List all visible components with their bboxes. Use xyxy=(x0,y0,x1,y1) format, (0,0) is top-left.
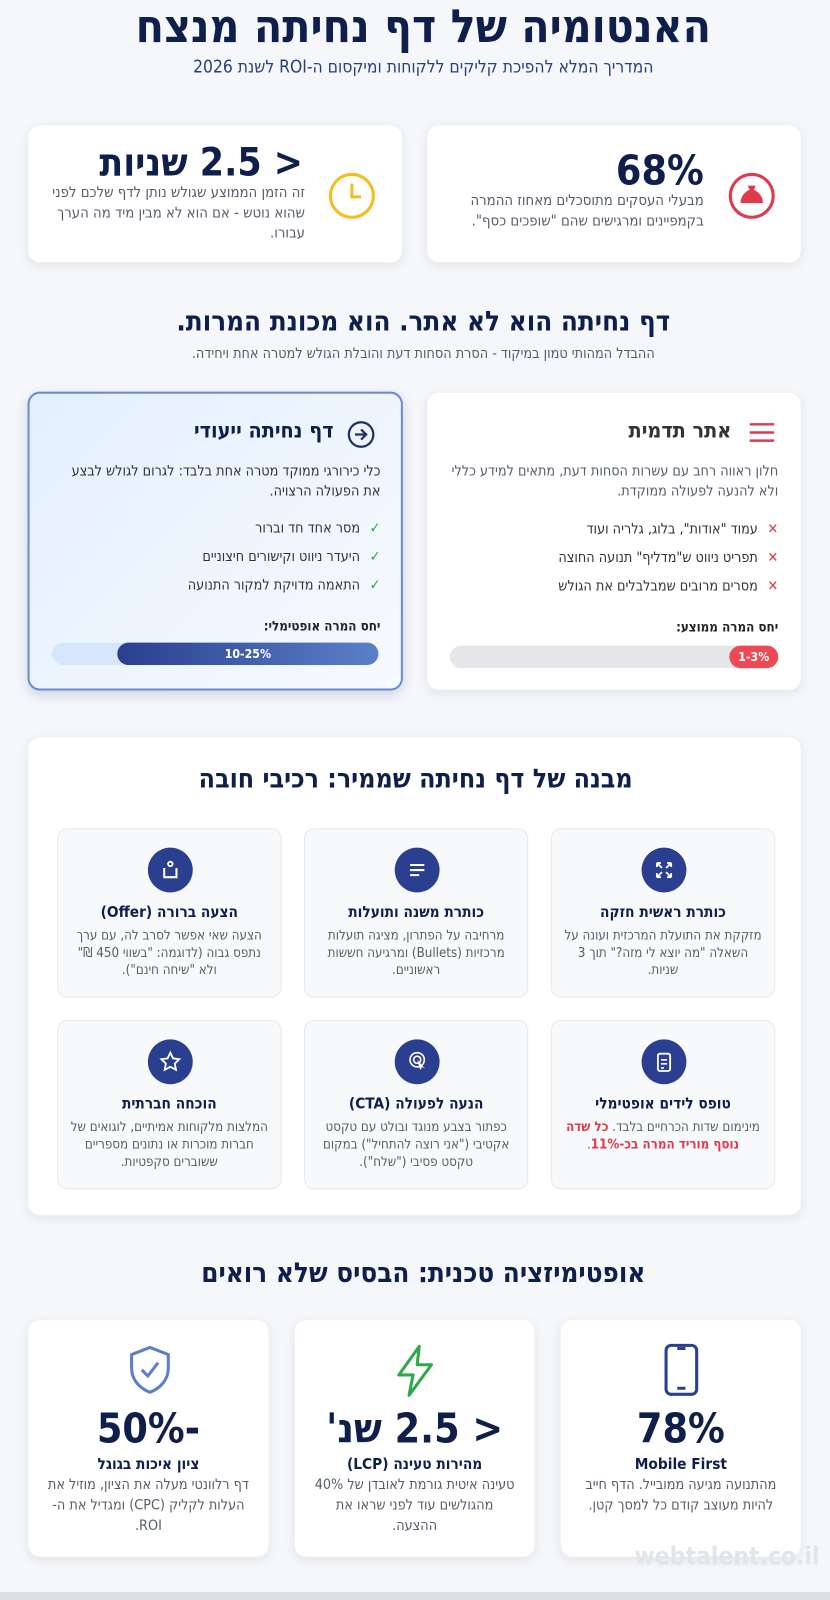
card: social proof: הוכחה חברתית xyxy=(122,1094,217,1113)
card: quality score: דף רלוונטי מעלה את הציון, מוזיל את העלות לקליק (CPC) ומגדיל את ה-ROI. xyxy=(48,1477,249,1534)
description: כלי כירורגי ממוקד מטרה אחת בלבד: לגרום לגולש לבצע את הפעולה הרצויה. xyxy=(72,463,380,500)
icon: shield xyxy=(130,1346,170,1394)
card: LCP: מהירות טעינה (LCP) xyxy=(347,1455,482,1473)
stat text: מבעלי העסקים מתוסכלים מאחוז ההמרה בקמפיינים ומרגישים שהם "שופכים כסף". xyxy=(470,193,704,230)
list: מסר אחד חד וברור xyxy=(255,520,360,537)
icon: lightning xyxy=(397,1344,434,1397)
icon: box xyxy=(148,848,193,892)
icon: expand xyxy=(642,848,686,892)
icon: money bag xyxy=(728,172,775,219)
bottom bar xyxy=(0,1592,830,1600)
card: mobile first: Mobile First xyxy=(635,1455,727,1473)
card: mobile first: מהתנועה מגיעה ממובייל. הדף חייב להיות מעוצב קודם כל למסך קטן. xyxy=(585,1477,776,1514)
icon: star xyxy=(148,1039,193,1084)
panel: structure xyxy=(28,736,802,1216)
panel: corporate site: מסרים מרובים שמבלבלים את הגולש xyxy=(558,578,758,595)
card: subheading xyxy=(304,828,528,998)
panel: landing page: ✓ xyxy=(370,577,380,594)
bar: 10-25% xyxy=(52,643,378,665)
card: headline: כותרת ראשית חזקה xyxy=(600,903,726,921)
description: חלון ראווה רחב עם עשרות הסחות דעת, מתאים למידע כללי ולא להנעה לפעולה ממוקדת. xyxy=(452,463,778,500)
panel: landing page: ✓ xyxy=(370,549,380,565)
card: LCP xyxy=(294,1319,536,1558)
title: האנטומיה של דף נחיתה מנצח xyxy=(136,0,711,53)
card: offer xyxy=(57,828,282,998)
card: subheading: כותרת משנה ותועלות xyxy=(348,903,484,921)
card: headline: מזקקת את התועלת המרכזית ועונה על השאלה "מה יוצא לי מזה?" תוך 3 שניות. xyxy=(564,928,762,978)
icon: clipboard xyxy=(642,1039,686,1084)
stat number: 68% xyxy=(616,148,704,195)
panel: corporate site: ✕ xyxy=(767,550,778,566)
card: LCP: < 2.5 שנ' xyxy=(326,1406,503,1452)
card: subheading: מרחיבה על הפתרון, מציגה תועלות מרכזיות (Bullets) ומרגיעה חששות ראשוניים. xyxy=(328,928,505,978)
card: mobile first xyxy=(560,1319,802,1558)
card: lead form xyxy=(551,1020,775,1189)
panel: corporate site: תפריט ניווט ש"מדליף" תנועה החוצה xyxy=(558,550,758,566)
section heading: landing page vs site: דף נחיתה הוא לא אתר. הוא מכונת המרות. xyxy=(176,306,670,338)
icon: clock xyxy=(328,172,375,219)
panel: landing page xyxy=(28,392,403,691)
icon: arrow circle xyxy=(348,421,374,448)
card: CTA xyxy=(304,1020,528,1189)
heading: אתר תדמית xyxy=(629,418,731,443)
card: social proof: המלצות מלקוחות אמיתיים, לוגואים של חברות מוכרות או נתונים מספריים ששוברים סקפטיות. xyxy=(71,1120,268,1170)
panel: corporate site xyxy=(426,392,802,691)
watermark: webtalent.co.il xyxy=(634,1542,820,1571)
card: LCP: טעינה איטית גורמת לאובדן של 40% מהגולשים עוד לפני שראו את ההצעה. xyxy=(315,1477,515,1534)
card: CTA: כפתור בצבע מנוגד ובולט עם טקסט אקטיבי ("אני רוצה להתחיל") במקום טקסט פסיבי ("שלח"). xyxy=(323,1120,509,1170)
card: quality score: -50% xyxy=(97,1406,200,1452)
icon: lines xyxy=(395,848,440,892)
list: עמוד "אודות", בלוג, גלריה ועוד xyxy=(587,521,758,538)
stat text: זה הזמן הממוצע שגולש נותן לדף שלכם לפני שהוא נוטש - אם הוא לא מבין מיד מה הערך עבורו. xyxy=(52,185,305,242)
bar: 10-25%: 10-25% xyxy=(225,647,271,661)
subtitle: המדריך המלא להפיכת קליקים ללקוחות ומיקסום ה-ROI לשנת 2026 xyxy=(193,57,653,78)
card: CTA: הנעה לפעולה (CTA) xyxy=(349,1094,483,1113)
card: lead form: מינימום שדות הכרחיים בלבד. כל שדה נוסף מוריד המרה בכ-11%. xyxy=(566,1120,760,1153)
card: mobile first: 78% xyxy=(637,1406,725,1452)
bar: 1-3% xyxy=(450,646,778,668)
icon: phone xyxy=(664,1344,698,1396)
section subtext: ההבדל המהותי טמון במיקוד - הסרת הסחות דעת והובלת הגולש למטרה אחת ויחידה. xyxy=(192,346,655,362)
heading: דף נחיתה ייעודי xyxy=(194,418,334,443)
list: ✕ xyxy=(767,521,778,538)
icon: hamburger xyxy=(750,423,774,442)
card: lead form: טופס לידים אופטימלי xyxy=(595,1094,731,1113)
panel: landing page: היעדר ניווט וקישורים חיצוניים xyxy=(202,549,360,565)
card: offer: הצעה שאי אפשר לסרב לה, עם ערך נתפס גבוה (לדוגמה: "בשווי 450 ₪" ולא "שיחה חינם"). xyxy=(77,928,262,978)
heading: מבנה של דף נחיתה שממיר: רכיבי חובה xyxy=(199,764,633,795)
panel: corporate site: ✕ xyxy=(767,578,778,595)
panel: landing page: התאמה מדויקת למקור התנועה xyxy=(188,577,360,594)
card: social proof xyxy=(57,1020,282,1189)
section heading: technical: אופטימיזציה טכנית: הבסיס שלא רואים xyxy=(201,1258,645,1289)
icon: click xyxy=(395,1039,440,1084)
list: ✓ xyxy=(370,520,380,537)
stat number: < 2.5 שניות xyxy=(99,140,303,185)
label: יחס המרה אופטימלי: xyxy=(264,619,380,634)
label: יחס המרה ממוצע: xyxy=(676,620,778,635)
stat card: 68% xyxy=(426,124,802,263)
card: headline xyxy=(551,828,775,998)
card: offer: הצעה ברורה (Offer) xyxy=(101,903,238,921)
card: quality score xyxy=(28,1319,269,1558)
bar: 1-3%: 1-3% xyxy=(738,650,769,664)
stat card: 2.5 seconds xyxy=(28,124,403,263)
card: quality score: ציון איכות בגוגל xyxy=(98,1455,199,1473)
